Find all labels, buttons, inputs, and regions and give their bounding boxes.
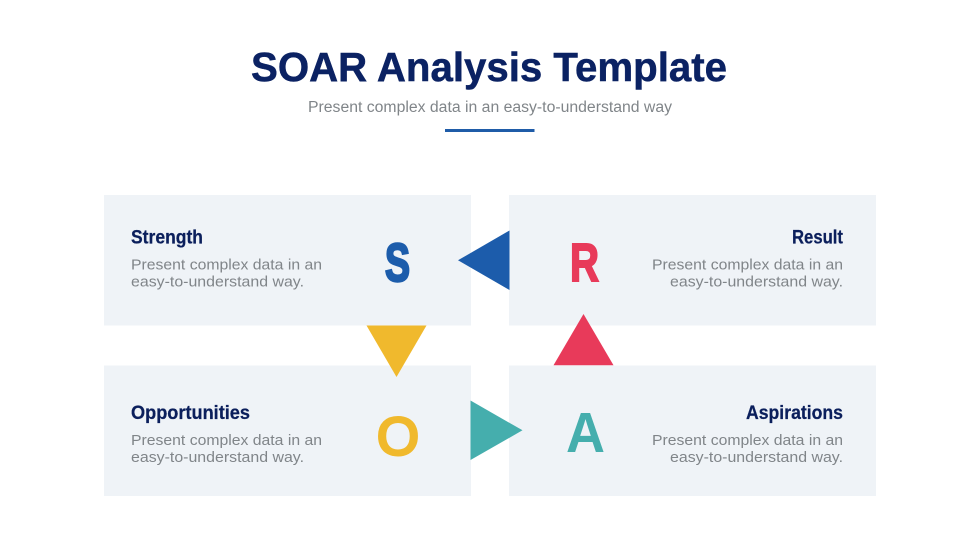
arrow: yellow triangle pointing down	[366, 326, 426, 377]
panel: result	[509, 195, 876, 326]
arrow: red triangle pointing up	[554, 314, 614, 365]
text: opportunities description	[131, 432, 322, 466]
subtitle: Present complex data in an easy-to-understand way	[308, 99, 672, 116]
heading: result: Result	[792, 228, 844, 248]
title: SOAR Analysis Template	[251, 44, 727, 90]
panel: opportunities	[104, 366, 471, 496]
heading: aspirations: Aspirations	[746, 403, 843, 424]
letter O: O	[377, 408, 419, 466]
text: result description: easy-to-understand way.	[670, 274, 843, 291]
text: opportunities description: easy-to-understand way.	[131, 449, 304, 466]
text: aspirations description: easy-to-understand way.	[670, 449, 843, 466]
text: strength description: easy-to-understand way.	[131, 274, 304, 291]
arrow: teal triangle pointing right	[470, 400, 522, 460]
heading: opportunities: Opportunities	[131, 403, 250, 424]
letter A: A	[566, 401, 605, 465]
text: aspirations description	[652, 432, 843, 466]
letter R: R	[570, 233, 599, 293]
text: strength description: Present complex data in an	[131, 256, 322, 274]
text: result description	[652, 256, 843, 291]
title underline	[445, 129, 534, 132]
text: aspirations description: Present complex data in an	[652, 432, 843, 449]
text: opportunities description: Present complex data in an	[131, 432, 322, 449]
letter S: S	[385, 233, 410, 293]
arrow: blue triangle pointing left	[458, 230, 510, 290]
text: strength description	[131, 256, 322, 291]
heading: strength: Strength	[131, 228, 203, 248]
text: result description: Present complex data in an	[652, 256, 843, 274]
panel: strength	[104, 195, 471, 326]
panel: aspirations	[509, 366, 876, 496]
